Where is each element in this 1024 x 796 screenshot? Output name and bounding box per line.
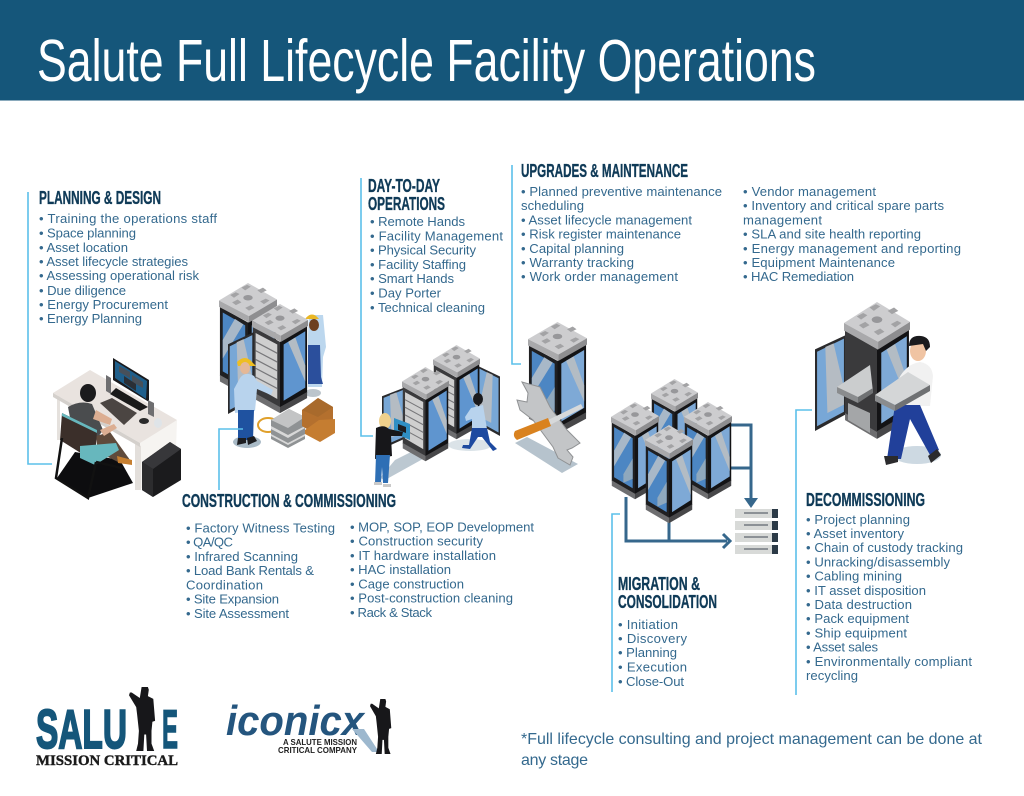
panel: construction and commissioning: • QA/QC [186, 534, 233, 550]
panel: upgrades and maintenance: • Risk register maintenance [521, 226, 681, 242]
panel: migration and consolidation [612, 514, 717, 692]
panel: day-to-day operations: • Physical Security [370, 242, 476, 258]
panel: decommissioning: • IT asset disposition [806, 583, 926, 598]
panel: upgrades and maintenance: • Equipment Maintenance [743, 255, 895, 270]
panel: planning and design: • Energy Planning [39, 311, 142, 326]
panel: day-to-day operations: • Facility Staffing [370, 257, 466, 272]
panel: construction and commissioning: Coordination [186, 578, 263, 592]
panel: construction and commissioning: • Load Bank Rentals & [186, 563, 314, 578]
panel: upgrades and maintenance: • Vendor management [743, 184, 876, 199]
panel: planning and design [28, 188, 217, 464]
panel: decommissioning: • Pack equipment [806, 611, 909, 626]
illustration: operator at desk [53, 358, 181, 498]
panel: migration and consolidation: • Discovery [618, 631, 687, 646]
panel: day-to-day operations: • Facility Management [370, 228, 503, 244]
panel: decommissioning: • Asset inventory [806, 526, 904, 541]
panel: construction and commissioning [182, 491, 534, 621]
panel: planning and design: • Asset lifecycle strategies [39, 254, 188, 269]
panel: construction and commissioning: • IT hardware installation [350, 548, 496, 563]
panel: construction and commissioning: • MOP, SOP, EOP Development [350, 520, 534, 534]
panel: construction and commissioning: CONSTRUCTION & COMMISSIONING [182, 491, 396, 511]
panel: upgrades and maintenance: • HAC Remediation [743, 269, 854, 284]
illustration: technician removing server [815, 302, 941, 465]
footnote: any stage [521, 752, 588, 769]
panel: upgrades and maintenance [512, 161, 961, 364]
panel: migration and consolidation: • Initiation [618, 617, 678, 632]
panel: day-to-day operations: • Smart Hands [370, 271, 454, 286]
panel: construction and commissioning: • Rack & Stack [350, 605, 432, 620]
panel: decommissioning: • Project planning [806, 512, 910, 527]
panel: planning and design: PLANNING & DESIGN [39, 188, 161, 208]
panel: decommissioning: • Cabling mining [806, 568, 902, 584]
panel: upgrades and maintenance: scheduling [521, 198, 584, 213]
panel: planning and design: • Due diligence [39, 283, 126, 298]
panel: upgrades and maintenance: • Planned preventive maintenance [521, 184, 722, 199]
panel: upgrades and maintenance: • Work order management [521, 269, 678, 284]
panel: day-to-day operations: OPERATIONS [368, 194, 445, 214]
panel: migration and consolidation: CONSOLIDATION [618, 592, 717, 612]
panel: decommissioning: • Environmentally compliant [806, 654, 972, 669]
panel: migration and consolidation: MIGRATION & [618, 574, 700, 594]
panel: migration and consolidation: • Execution [618, 660, 687, 674]
panel: upgrades and maintenance: • SLA and site health reporting [743, 226, 921, 242]
illustration: migration racks with arrows and server stack [611, 379, 778, 554]
illustration: construction crew at racks [219, 283, 335, 448]
panel: migration and consolidation: • Planning [618, 645, 677, 660]
logo: iconicx: iconicx [226, 697, 366, 744]
logo: iconicx: A SALUTE MISSION [283, 737, 357, 747]
panel: decommissioning: DECOMMISSIONING [806, 490, 925, 510]
panel: day-to-day operations [361, 176, 503, 436]
logo: iconicx: CRITICAL COMPANY [278, 745, 357, 755]
logo: Salute Mission Critical: MISSION CRITICAL [36, 753, 178, 769]
panel: planning and design: • Assessing operational risk [39, 268, 199, 283]
panel: planning and design: • Asset location [39, 240, 128, 255]
illustration: rack with wrench and screwdriver [514, 322, 587, 473]
panel: construction and commissioning: • HAC installation [350, 562, 451, 577]
text: E [162, 698, 178, 760]
panel: decommissioning [796, 410, 972, 695]
panel: decommissioning: • Data destruction [806, 597, 912, 612]
panel: upgrades and maintenance: UPGRADES & MAINTENANCE [521, 161, 688, 181]
panel: decommissioning: recycling [806, 668, 858, 683]
illustration: technicians at open racks [374, 345, 500, 487]
panel: decommissioning: • Ship equipment [806, 626, 907, 640]
panel: construction and commissioning: • Site Expansion [186, 592, 279, 606]
panel: day-to-day operations: • Remote Hands [370, 214, 465, 229]
panel: planning and design: • Space planning [39, 226, 136, 240]
panel: decommissioning: • Unracking/disassembly [806, 554, 950, 570]
footnote [521, 731, 983, 769]
logo: Salute Mission Critical: SALU [36, 698, 127, 760]
panel: day-to-day operations: DAY-TO-DAY [368, 176, 440, 196]
panel: construction and commissioning: • Construction security [350, 534, 483, 548]
panel: upgrades and maintenance: • Warranty tracking [521, 255, 634, 270]
panel: planning and design: • Energy Procurement [39, 297, 168, 312]
panel: day-to-day operations: • Day Porter [370, 286, 442, 300]
panel: decommissioning: • Chain of custody tracking [806, 540, 963, 555]
panel: upgrades and maintenance: • Capital planning [521, 241, 624, 256]
panel: migration and consolidation: • Close-Out [618, 674, 684, 689]
panel: upgrades and maintenance: • Asset lifecycle management [521, 212, 692, 228]
connector: construction and commissioning [219, 429, 243, 490]
panel: day-to-day operations: • Technical cleaning [370, 300, 485, 315]
panel: construction and commissioning: • Cage construction [350, 576, 464, 592]
panel: planning and design: • Training the operations staff [39, 211, 217, 226]
panel: decommissioning: • Asset sales [806, 640, 878, 654]
title banner [0, 0, 1024, 100]
panel: construction and commissioning: • Infrared Scanning [186, 549, 298, 564]
panel: upgrades and maintenance: • Inventory and critical spare parts [743, 198, 944, 213]
footnote: *Full lifecycle consulting and project management can be done at [521, 731, 983, 748]
panel: construction and commissioning: • Post-construction cleaning [350, 590, 513, 606]
panel: construction and commissioning: • Site Assessment [186, 606, 289, 621]
panel: upgrades and maintenance: • Energy management and reporting [743, 241, 961, 256]
panel: upgrades and maintenance: management [743, 212, 822, 228]
panel: construction and commissioning: • Factory Witness Testing [186, 520, 335, 536]
